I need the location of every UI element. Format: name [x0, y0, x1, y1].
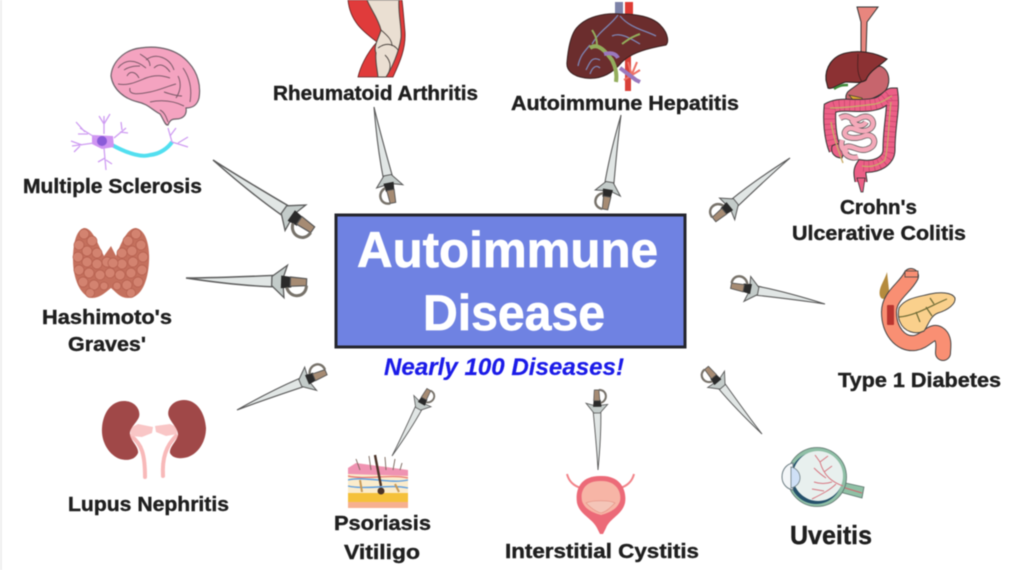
panel: psoriasis vitiligo — [334, 455, 431, 564]
icon: kidneys — [102, 400, 206, 477]
label: Psoriasis: Psoriasis — [334, 513, 431, 535]
panel: multiple sclerosis — [23, 47, 202, 198]
panel: thyroid — [42, 228, 172, 356]
panel: rheumatoid arthritis — [273, 0, 478, 105]
panel: autoimmune hepatitis — [511, 2, 739, 115]
label: Type 1 Diabetes — [838, 370, 1001, 392]
panel: lupus nephritis — [68, 400, 229, 516]
icon: bladder — [567, 474, 634, 534]
label: Crohn's: Crohn's — [840, 197, 917, 219]
icon: pancreas and duodenum — [880, 271, 955, 353]
icon: brain — [111, 47, 200, 125]
panel: uveitis — [782, 448, 872, 550]
arrow: sword to hashimoto's graves' — [185, 262, 307, 298]
panel: type 1 diabetes — [838, 271, 1001, 392]
arrow: sword to multiple sclerosis — [204, 147, 322, 243]
label: Hashimoto's: Hashimoto's — [42, 307, 172, 329]
label: Multiple Sclerosis — [23, 176, 202, 198]
icon: thyroid gland — [73, 228, 149, 298]
arrow: sword to crohn's colitis — [706, 148, 798, 230]
label: Interstitial Cystitis — [505, 541, 699, 563]
arrow: sword to rheumatoid arthritis — [361, 104, 406, 205]
label: Autoimmune Hepatitis — [511, 93, 739, 115]
label: Lupus Nephritis — [68, 494, 229, 516]
title: Disease: Disease — [423, 285, 605, 341]
arrow: sword to type 1 diabetes — [729, 273, 827, 317]
panel: interstitial cystitis — [505, 474, 699, 563]
icon: digestive system — [826, 7, 892, 192]
icon: eye — [782, 448, 864, 506]
label: Ulcerative Colitis: Ulcerative Colitis — [792, 223, 966, 245]
arrow: sword to lupus nephritis — [232, 360, 331, 422]
icon: skin cross section — [348, 455, 408, 508]
label: Rheumatoid Arthritis — [273, 83, 478, 105]
label: Vitiligo: Vitiligo — [344, 542, 420, 564]
title: Autoimmune: Autoimmune — [357, 222, 658, 278]
label: Uveitis — [790, 520, 872, 550]
icon: knee — [348, 0, 405, 77]
subtitle: Nearly 100 Diseases! — [384, 354, 624, 381]
panel: central title box — [336, 215, 685, 347]
arrow: sword to psoriasis vitiligo — [383, 385, 438, 461]
arrow: sword to autoimmune hepatitis — [592, 113, 634, 211]
label: Graves': Graves' — [68, 334, 146, 356]
icon: liver — [567, 2, 668, 91]
panel: crohn's ulcerative colitis — [792, 7, 966, 245]
arrow: sword to uveitis — [698, 360, 771, 441]
arrow: sword to interstitial cystitis — [586, 390, 609, 470]
icon: neuron — [71, 114, 188, 170]
